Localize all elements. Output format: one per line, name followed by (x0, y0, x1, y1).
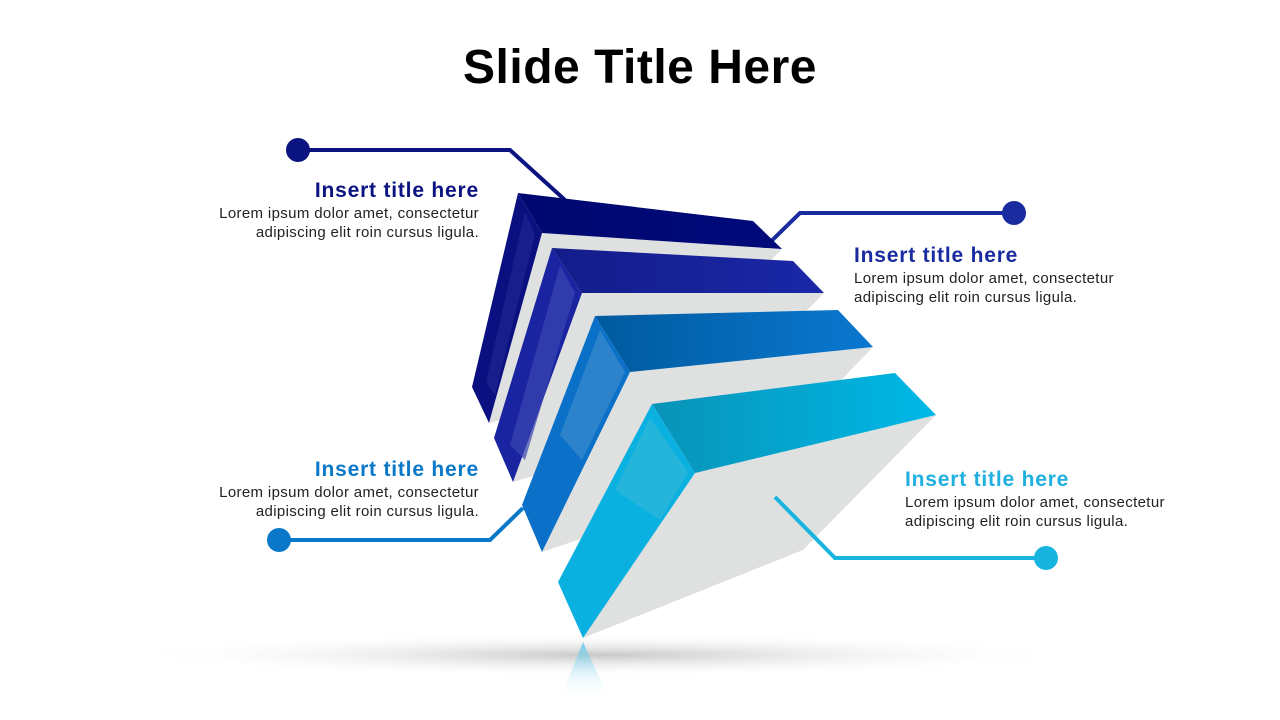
text block: bottom-left: Lorem ipsum dolor amet, consectetur (219, 484, 479, 501)
reflection (560, 642, 610, 700)
connector: top-left (286, 138, 565, 200)
layer 2 (494, 248, 824, 482)
text block: bottom-left (219, 458, 479, 520)
text block: bottom-right: adipiscing elit roin cursus ligula. (905, 513, 1128, 530)
floor shadow (120, 633, 1080, 677)
connector: bottom-left (267, 508, 523, 552)
text block: top-right: Insert title here (854, 244, 1018, 267)
text block: bottom-right (905, 468, 1165, 530)
text block: top-left: Insert title here (315, 179, 479, 202)
connector: top-right (752, 201, 1026, 260)
text block: bottom-right: Insert title here (905, 468, 1069, 491)
title: Slide Title Here (463, 41, 817, 94)
text block: top-right: adipiscing elit roin cursus ligula. (854, 289, 1077, 306)
text block: top-left: Lorem ipsum dolor amet, consectetur (219, 205, 479, 222)
text block: bottom-left: adipiscing elit roin cursus ligula. (256, 503, 479, 520)
connector: bottom-right (775, 497, 1058, 570)
text block: bottom-right: Lorem ipsum dolor amet, consectetur (905, 494, 1165, 511)
text block: top-left (219, 179, 479, 241)
layer 3 (522, 310, 873, 552)
text block: top-right: Lorem ipsum dolor amet, consectetur (854, 270, 1114, 287)
text block: bottom-left: Insert title here (315, 458, 479, 481)
text block: top-right (854, 244, 1114, 306)
layer 1 (472, 193, 782, 423)
text block: top-left: adipiscing elit roin cursus ligula. (256, 224, 479, 241)
layer 4 (558, 373, 936, 638)
